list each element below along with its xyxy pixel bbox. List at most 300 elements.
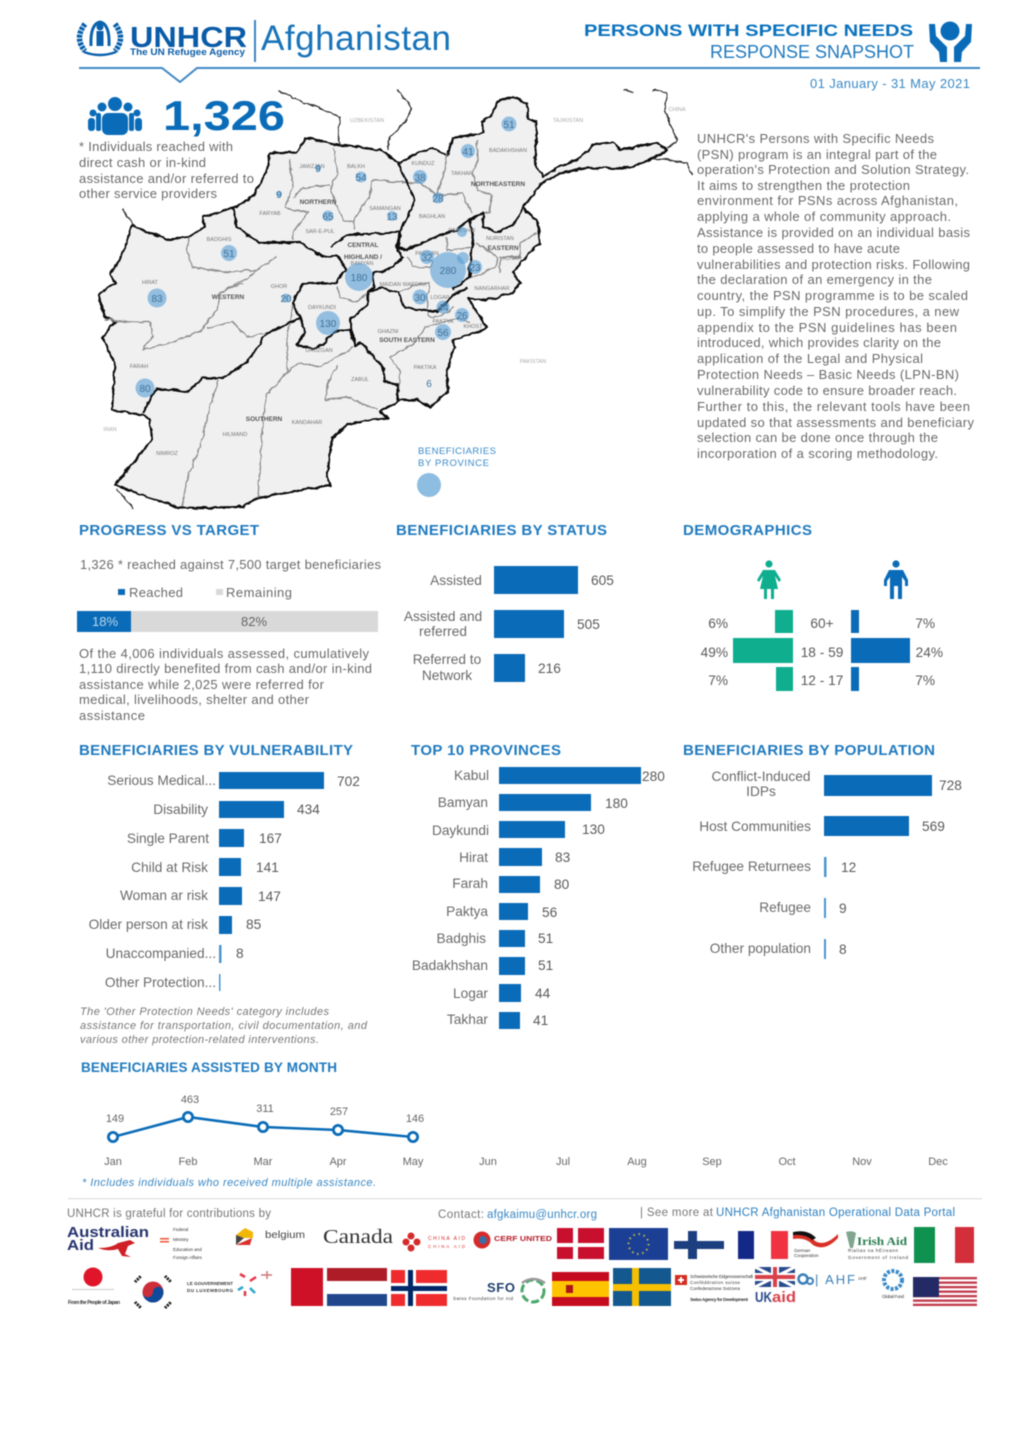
region labels: NORTHEASTERN xyxy=(471,181,525,188)
bar chart: Farah xyxy=(452,876,488,891)
UNHCR logo: The UN Refugee Agency xyxy=(130,47,245,57)
intro text: vulnerabilities and protection risks. Following xyxy=(697,257,970,272)
logo: Irish Aid: Rialtas na hÉireann xyxy=(848,1247,898,1253)
bar chart: Badghis xyxy=(437,931,486,946)
bar chart: Refugee Returnees xyxy=(692,859,811,874)
line chart: Jan xyxy=(104,1156,122,1168)
map of Afghanistan xyxy=(98,90,692,508)
intro text: It aims to strengthen the protection xyxy=(697,178,910,193)
bubble values: 54 xyxy=(355,173,367,184)
bar chart: Child at Risk xyxy=(131,860,208,875)
province labels: FARYAB xyxy=(259,211,281,217)
panel: beneficiaries by vulnerability xyxy=(79,742,368,1046)
logo: China xyxy=(402,1232,466,1252)
province labels: HILMAND xyxy=(223,432,247,438)
bar chart: Host Communities xyxy=(699,819,811,834)
logo: UN blue emblem xyxy=(882,1271,904,1299)
flag: Norway xyxy=(391,1270,447,1306)
bar chart: 434 xyxy=(297,802,320,817)
province labels: BADAKHSHAN xyxy=(489,148,527,154)
age pyramid: 7% xyxy=(915,616,935,631)
bar chart: 9 xyxy=(839,901,847,916)
logo: Switzerland: Schweizerische Eidgenossenschaft xyxy=(690,1274,754,1279)
bar chart: Assisted and xyxy=(404,609,482,624)
flag: European Union xyxy=(609,1228,668,1260)
country shape xyxy=(98,97,667,508)
bar chart xyxy=(692,769,962,959)
line chart: 463 xyxy=(181,1094,199,1106)
line chart: Dec xyxy=(928,1156,948,1168)
logo: Luxembourg xyxy=(187,1271,272,1296)
intro text: introduced, which provides clarity on the xyxy=(697,335,941,350)
bubble values: 280 xyxy=(440,266,457,277)
progress note: 1,110 directly benefited from cash and/or in-kind xyxy=(79,661,372,676)
bubble values: 9 xyxy=(315,164,321,175)
subtitle: PERSONS WITH SPECIFIC NEEDS xyxy=(584,21,913,40)
progress note: Of the 4,006 individuals assessed, cumulatively xyxy=(79,646,370,661)
bar chart: Conflict-Induced xyxy=(712,769,810,784)
flag: Italy xyxy=(914,1227,974,1263)
bar chart: Network xyxy=(422,668,472,683)
footnote: * Includes individuals who received multiple assistance. xyxy=(82,1177,376,1189)
age pyramid: 7% xyxy=(915,673,935,688)
logo: Austria: Ministry xyxy=(173,1237,189,1242)
bar chart: 51 xyxy=(538,958,553,973)
bubble values: 51 xyxy=(503,120,515,131)
bar chart: 605 xyxy=(591,573,614,588)
category note xyxy=(80,1006,368,1046)
footer: afgkaimu@unhcr.org xyxy=(487,1209,597,1221)
logo: Irish Aid: Government of Ireland xyxy=(848,1255,908,1260)
logo: Germany: Cooperation xyxy=(794,1253,819,1258)
intro text: incorporation of a scoring methodology. xyxy=(697,446,938,461)
age pyramid: 12 - 17 xyxy=(801,673,843,688)
bubble values: 13 xyxy=(386,212,398,223)
logo: Switzerland: Confédération suisse xyxy=(690,1280,740,1285)
line chart: 311 xyxy=(256,1103,274,1115)
bar chart: Referred to xyxy=(413,652,482,667)
bar chart: 56 xyxy=(542,905,558,920)
age pyramid: 7% xyxy=(708,673,728,688)
bubble values: 26 xyxy=(456,311,468,322)
progress bar xyxy=(77,611,378,632)
region labels: WESTERN xyxy=(212,294,245,301)
key figure note: other service providers xyxy=(79,186,218,201)
map legend: BY PROVINCE xyxy=(418,458,489,469)
line chart: Mar xyxy=(254,1156,273,1168)
heading: DEMOGRAPHICS xyxy=(683,522,812,539)
bar chart: Woman ar risk xyxy=(120,888,208,903)
bubble values: 30 xyxy=(414,293,426,304)
logo: Japan xyxy=(68,1268,120,1306)
bubble values: 28 xyxy=(432,194,444,205)
logo: Belgium xyxy=(236,1228,305,1245)
bar chart: 83 xyxy=(555,850,571,865)
icon: group of people xyxy=(88,97,142,135)
province labels: LOGAR xyxy=(430,295,450,301)
intro text: vulnerability code to ensure broader reach. xyxy=(697,383,957,398)
title: Afghanistan xyxy=(261,19,451,58)
province labels: ZABUL xyxy=(351,377,369,383)
province labels: KHOST xyxy=(464,324,483,330)
line chart: Aug xyxy=(627,1156,647,1168)
map legend xyxy=(417,446,496,497)
neighbouring country labels: IRAN xyxy=(103,427,117,433)
logo: Australian Aid: Aid xyxy=(67,1237,94,1254)
province labels: DAYKUNDI xyxy=(308,305,336,311)
logo: UK aid: aid xyxy=(772,1289,796,1306)
donor logos xyxy=(67,1224,977,1308)
logo: AHF: | AHF xyxy=(815,1272,855,1287)
intro text: the declaration of an emergency in the xyxy=(697,272,932,287)
bubble values: 20 xyxy=(280,294,292,305)
flag: Sweden xyxy=(613,1268,671,1306)
province labels: NIMROZ xyxy=(156,451,178,457)
bar chart: IDPs xyxy=(746,784,776,799)
intro text: applying a whole of community approach. xyxy=(697,209,951,224)
logo: SFO xyxy=(453,1279,545,1302)
progress note: assistance xyxy=(79,708,145,723)
logo: UN blue emblem: Global Fund xyxy=(882,1294,904,1299)
province labels: GHOR xyxy=(271,284,287,290)
map legend: BENEFICIARIES xyxy=(418,446,496,457)
bar chart: 41 xyxy=(533,1013,548,1028)
intro text: environment for PSNs across Afghanistan, xyxy=(697,193,958,208)
logo: SFO: Swiss Foundation for Aid xyxy=(453,1296,513,1301)
logo: UK aid: UK xyxy=(755,1289,772,1306)
line chart: Jun xyxy=(479,1156,497,1168)
logo: Australian Aid xyxy=(67,1224,149,1257)
subtitle xyxy=(584,21,914,62)
logo: Switzerland xyxy=(675,1274,754,1302)
logo: Switzerland: Confederazione Svizzera xyxy=(690,1286,740,1291)
bar chart: 505 xyxy=(577,617,600,632)
bubble values: 41 xyxy=(462,147,474,158)
panel: top 10 provinces xyxy=(411,742,665,1029)
key figure note: assistance and/or referred to xyxy=(79,171,254,186)
portal link: | See more at xyxy=(640,1207,714,1219)
bar chart: 280 xyxy=(642,769,665,784)
bar chart: 141 xyxy=(256,860,279,875)
bubble values: 38 xyxy=(414,173,426,184)
bubble values: 6 xyxy=(426,379,432,390)
intro text xyxy=(697,131,974,461)
bar chart: 51 xyxy=(538,931,553,946)
bar chart: 130 xyxy=(582,822,605,837)
bubble values: 83 xyxy=(151,294,163,305)
province labels: BALKH xyxy=(347,164,365,170)
flag: South Korea xyxy=(135,1276,171,1308)
region labels: SOUTHERN xyxy=(246,416,283,423)
bubble values: 51 xyxy=(223,249,235,260)
logo: AHF: AHF xyxy=(858,1276,867,1281)
province labels: NURISTAN xyxy=(486,236,514,242)
bar chart: 80 xyxy=(554,877,570,892)
bar chart xyxy=(89,772,360,991)
intro text: up. To simplify the PSN procedures, a new xyxy=(697,304,960,319)
bar chart: Disability xyxy=(153,802,208,817)
category note: The 'Other Protection Needs' category includes xyxy=(80,1006,330,1018)
neighbouring country labels: TAJIKISTAN xyxy=(553,118,583,124)
key figure note: * Individuals reached with xyxy=(79,139,233,154)
line chart: Jul xyxy=(556,1156,570,1168)
logo: Irish Aid xyxy=(846,1231,908,1260)
logo: Germany: German xyxy=(794,1248,811,1253)
logo: Luxembourg: LE GOUVERNEMENT xyxy=(187,1281,233,1286)
logo: Belgium: belgium xyxy=(265,1230,305,1241)
flag: Spain xyxy=(552,1272,609,1306)
flag: United States xyxy=(913,1277,977,1306)
legend: Reached xyxy=(129,585,183,600)
panel: demographics xyxy=(683,522,943,691)
panel: beneficiaries by population xyxy=(683,742,962,959)
header rule with notch xyxy=(79,68,980,82)
region labels: HIGHLAND / xyxy=(344,254,382,261)
province labels: URUZGAN xyxy=(305,348,333,354)
progress note xyxy=(79,646,372,723)
line chart: 149 xyxy=(106,1113,124,1125)
intro text: updated so that assessments and beneficiary xyxy=(697,415,974,430)
intro text: Further to this, the relevant tools have been xyxy=(697,399,970,414)
province boundaries xyxy=(105,140,537,507)
province labels: GHAZNI xyxy=(378,329,399,335)
region labels: NORTHERN xyxy=(300,199,337,206)
bar chart: Paktya xyxy=(446,904,488,919)
logo: Germany xyxy=(793,1231,838,1258)
neighbouring country labels xyxy=(103,107,686,433)
flag: France xyxy=(738,1231,788,1259)
category note: assistance for transportation, civil documentation, and xyxy=(80,1020,368,1032)
logo: Switzerland: Swiss Agency for Development xyxy=(690,1297,748,1302)
category note: various other protection-related interventions. xyxy=(80,1034,319,1046)
logo: UK aid xyxy=(755,1267,796,1306)
province labels: TAKHAR xyxy=(451,171,473,177)
bubble values: 56 xyxy=(437,328,449,339)
line chart: 257 xyxy=(330,1106,348,1118)
province labels: JAWZJAN xyxy=(299,164,325,170)
intro text: appendix to the PSN guidelines has been xyxy=(697,320,957,335)
province labels xyxy=(130,148,527,457)
bubble values: 130 xyxy=(320,319,337,330)
bar chart: Serious Medical... xyxy=(107,773,216,788)
logo: Austria: Education and xyxy=(173,1247,202,1252)
province labels: SAR-E-PUL xyxy=(305,229,335,235)
line chart: May xyxy=(403,1156,424,1168)
bar chart: Older person at risk xyxy=(89,917,208,932)
target sentence: 1,326 * reached against 7,500 target beneficiaries xyxy=(80,557,382,572)
neighbouring country labels: CHINA xyxy=(668,107,686,113)
logo: Canada: Canada xyxy=(323,1226,393,1248)
logo: Irish Aid: Irish Aid xyxy=(857,1234,907,1248)
logo: Australian Aid: Australian xyxy=(67,1224,149,1241)
age pyramid: 60+ xyxy=(810,616,834,631)
bar chart: Daykundi xyxy=(432,823,489,838)
bar chart: Other population xyxy=(710,941,811,956)
contributions text: UNHCR is grateful for contributions by xyxy=(67,1208,271,1220)
intro text: Protection Needs – Basic Needs (LPN-BN) xyxy=(697,367,959,382)
bar chart: 147 xyxy=(258,889,281,904)
legend: Remaining xyxy=(226,585,292,600)
intro text: country, the PSN programme is to be scaled xyxy=(697,288,968,303)
regional boundaries xyxy=(143,163,523,413)
line chart: 146 xyxy=(406,1113,424,1125)
bar chart: 167 xyxy=(259,831,282,846)
subtitle: RESPONSE SNAPSHOT xyxy=(710,42,914,62)
logo: Austria xyxy=(160,1227,203,1260)
heading: BENEFICIARIES BY POPULATION xyxy=(683,742,935,759)
logo: China: CHINA AID xyxy=(428,1236,465,1242)
UNHCR logo: UNHCR xyxy=(130,22,247,54)
province labels: MAIDAN WARDAK xyxy=(380,282,427,288)
province labels: PAKTYA xyxy=(433,319,454,325)
progress bar: 82% xyxy=(241,614,267,629)
bar chart: Refugee xyxy=(759,900,811,915)
heading: BENEFICIARIES BY STATUS xyxy=(396,522,607,539)
bar chart: Takhar xyxy=(447,1012,488,1027)
age pyramid: 24% xyxy=(916,645,943,660)
age pyramid: 49% xyxy=(701,645,728,660)
legend xyxy=(118,585,292,600)
intro text: selection can be done once through the xyxy=(697,430,938,445)
header xyxy=(79,19,980,91)
bar chart: 44 xyxy=(535,986,551,1001)
bubble values xyxy=(139,120,515,395)
bubble values: 80 xyxy=(139,384,151,395)
progress bar: 18% xyxy=(92,614,118,629)
province labels: KUNDUZ xyxy=(412,161,435,167)
bar chart: Bamyan xyxy=(438,795,488,810)
bubble values: 65 xyxy=(322,212,334,223)
province labels: BAMYAN xyxy=(351,261,373,267)
logo: Austria: Federal xyxy=(173,1227,188,1232)
bubble values: 44 xyxy=(437,303,449,314)
bar chart: Logar xyxy=(453,986,488,1001)
panel: beneficiaries by status xyxy=(396,522,614,683)
intro text: application of the Legal and Physical xyxy=(697,351,923,366)
bubble values: 9 xyxy=(276,190,282,201)
contact: Contact: xyxy=(438,1209,484,1221)
line chart: Feb xyxy=(179,1156,197,1168)
province labels: PAKTIKA xyxy=(414,365,437,371)
flag: Finland xyxy=(674,1231,724,1259)
region labels xyxy=(212,181,525,423)
bar chart: 8 xyxy=(236,946,244,961)
bar chart: referred xyxy=(419,624,467,639)
bar chart: Hirat xyxy=(459,850,488,865)
total reached: 1,326 xyxy=(163,92,285,139)
bar chart: 569 xyxy=(922,819,945,834)
bar chart: 702 xyxy=(337,774,360,789)
icon: hands holding person xyxy=(929,22,972,62)
flag: Monaco xyxy=(291,1268,323,1306)
intro text: UNHCR's Persons with Specific Needs xyxy=(697,131,934,146)
age pyramid xyxy=(701,610,943,691)
flag: Denmark xyxy=(557,1228,604,1259)
footer xyxy=(67,1198,982,1308)
bubble values: 23 xyxy=(469,263,481,274)
logo: CERF xyxy=(474,1232,552,1248)
bar chart: 12 xyxy=(841,860,856,875)
region labels: EASTERN xyxy=(487,245,519,252)
flag: Netherlands xyxy=(327,1268,387,1306)
province labels: PANJSHIR xyxy=(449,228,475,234)
province labels: KUNAR xyxy=(502,256,522,262)
icon: woman xyxy=(757,560,781,599)
bar chart xyxy=(412,767,665,1029)
icon: man xyxy=(884,560,908,599)
footer: UNHCR Afghanistan Operational Data Portal xyxy=(716,1207,955,1219)
date: 01 January - 31 May 2021 xyxy=(810,76,970,91)
line chart xyxy=(104,1094,948,1168)
progress note: medical, livelihoods, shelter and other xyxy=(79,692,310,707)
region labels: CENTRAL xyxy=(347,242,379,249)
bar chart: 8 xyxy=(839,942,847,957)
logo: Austria: Foreign Affairs xyxy=(173,1255,203,1260)
age pyramid: 18 - 59 xyxy=(801,645,843,660)
heading: PROGRESS VS TARGET xyxy=(79,522,259,539)
bar chart: Badakhshan xyxy=(412,958,488,973)
line chart: Sep xyxy=(702,1156,722,1168)
logo: China: CHINA AID xyxy=(428,1244,466,1249)
province labels: BAGHLAN xyxy=(419,214,445,220)
progress note: assistance while 2,025 were referred for xyxy=(79,677,325,692)
province labels: NANGARHAR xyxy=(474,286,510,292)
heading: BENEFICIARIES BY VULNERABILITY xyxy=(79,742,353,759)
province labels: HIRAT xyxy=(142,280,159,286)
age pyramid: 6% xyxy=(708,616,728,631)
bar chart: 180 xyxy=(605,796,628,811)
logo: AHF xyxy=(798,1272,867,1287)
bar chart: Single Parent xyxy=(127,831,209,846)
bar chart: Assisted xyxy=(430,573,482,588)
line chart: Nov xyxy=(852,1156,872,1168)
logo: CERF: CERF UNITED xyxy=(494,1236,552,1243)
bar chart: 85 xyxy=(246,917,262,932)
key figure note xyxy=(79,139,254,201)
logo: Japan: From the People of Japan xyxy=(68,1300,120,1306)
bubble values: 32 xyxy=(421,253,433,264)
key figure note: direct cash or in-kind xyxy=(79,155,206,170)
bar chart: Kabul xyxy=(454,768,489,783)
UNHCR logo xyxy=(80,22,247,57)
line chart: Oct xyxy=(778,1156,796,1168)
intro text: (PSN) program is an integral part of the xyxy=(697,147,937,162)
province labels: BADGHIS xyxy=(207,237,232,243)
panel: beneficiaries assisted by month xyxy=(81,1060,948,1189)
logo: SFO: SFO xyxy=(487,1280,515,1295)
bubble values: 180 xyxy=(351,273,368,284)
intro text: to people assessed to have acute xyxy=(697,241,900,256)
key figure xyxy=(79,92,285,201)
intro text: operation's Protection and Solution Strategy. xyxy=(697,162,969,177)
logo: Luxembourg: DU LUXEMBOURG xyxy=(187,1288,233,1293)
bar chart: Unaccompanied... xyxy=(106,946,216,961)
line chart: Apr xyxy=(329,1156,347,1168)
intro text: Assistance is provided on an individual basis xyxy=(697,225,970,240)
region labels: SOUTH EASTERN xyxy=(379,337,435,344)
province labels: FARAH xyxy=(130,364,148,370)
bar chart: 728 xyxy=(939,778,962,793)
bar chart xyxy=(404,566,614,683)
province labels: SAMANGAN xyxy=(369,206,401,212)
heading: TOP 10 PROVINCES xyxy=(411,742,561,759)
neighbouring borders xyxy=(117,90,692,508)
province bubbles xyxy=(136,116,516,398)
bar chart: Other Protection... xyxy=(105,975,216,990)
province labels: PARWAN xyxy=(415,251,439,257)
neighbouring country labels: PAKISTAN xyxy=(520,359,546,365)
bar chart: 216 xyxy=(538,661,561,676)
